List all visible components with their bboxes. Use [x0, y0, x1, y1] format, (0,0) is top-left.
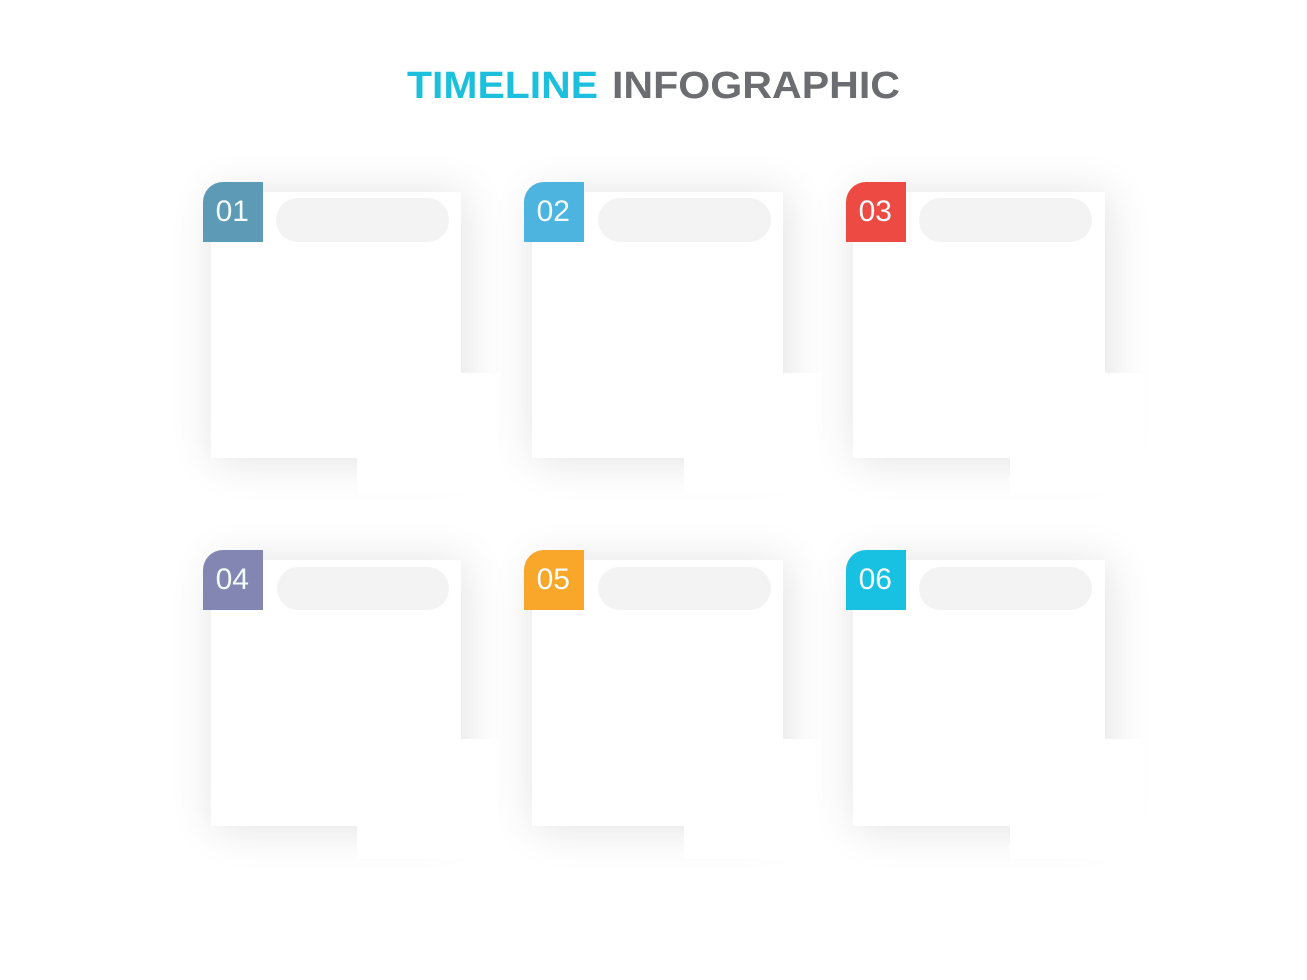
number tag 02: 02	[537, 195, 570, 228]
panel: step 05	[522, 550, 798, 840]
panel: step 02	[522, 182, 798, 472]
number tag 01	[203, 182, 262, 242]
panel: step 01	[202, 182, 476, 472]
number tag 05: 05	[537, 563, 570, 596]
title: INFOGRAPHIC	[612, 65, 900, 107]
heading placeholder 05	[598, 567, 771, 610]
number tag 03: 03	[859, 195, 892, 228]
number tag 04: 04	[216, 563, 249, 596]
panel: step 03	[844, 182, 1120, 472]
title	[407, 65, 900, 107]
panel: step 06	[844, 550, 1120, 840]
number tag 06: 06	[859, 563, 892, 596]
number tag 05	[524, 550, 584, 610]
number tag 02	[524, 182, 584, 242]
number tag 06	[846, 550, 906, 610]
heading placeholder 02	[598, 198, 771, 242]
heading placeholder 04	[277, 567, 449, 610]
panel: step 04	[202, 550, 476, 840]
number tag 01: 01	[216, 195, 249, 228]
title: TIMELINE	[407, 65, 598, 107]
heading placeholder 03	[919, 198, 1092, 242]
number tag 04	[203, 550, 262, 610]
heading placeholder 01	[276, 198, 449, 242]
heading placeholder 06	[919, 567, 1092, 610]
number tag 03	[846, 182, 906, 242]
